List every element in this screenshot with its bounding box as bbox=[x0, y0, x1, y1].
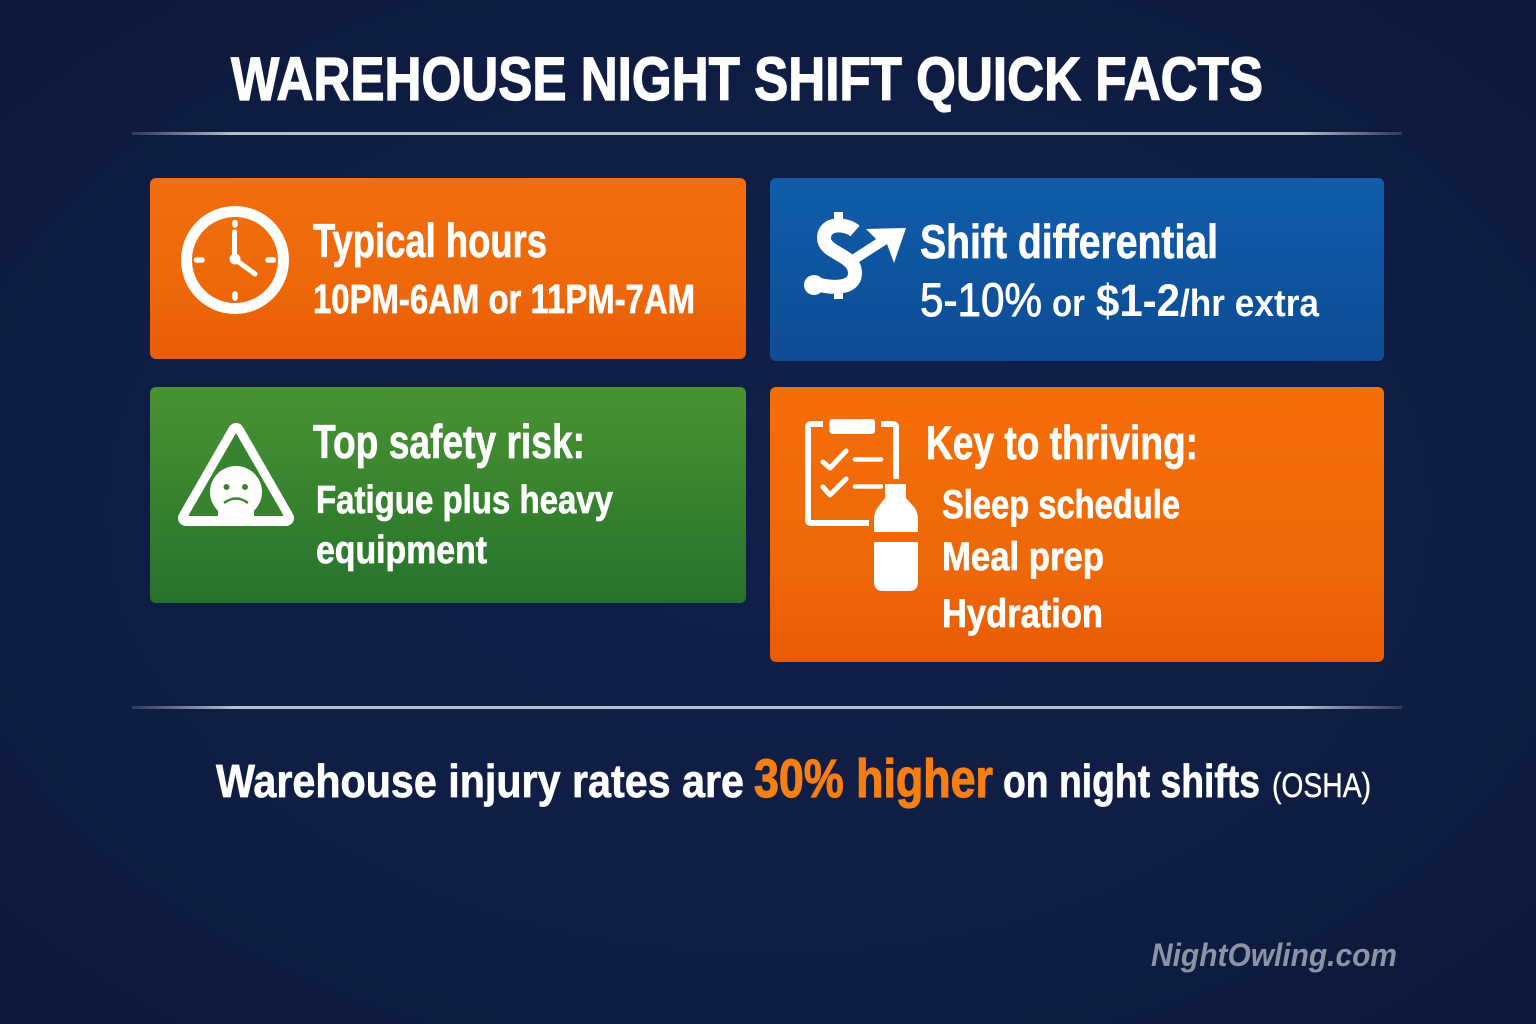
text: fatigue plus heavy equipment: Fatigue plus heavy bbox=[316, 479, 613, 522]
panel: shift differential bbox=[770, 178, 1384, 361]
callout: injury rate statistic: Warehouse injury rates are bbox=[216, 755, 744, 807]
callout: injury rate statistic: (OSHA) bbox=[1272, 767, 1371, 805]
text: hours values: 10PM-6AM or 11PM-7AM bbox=[313, 276, 695, 322]
watermark: NightOwling.com: NightOwling.com bbox=[1151, 937, 1397, 973]
icon: clock bbox=[186, 212, 284, 308]
panel: typical hours bbox=[150, 178, 746, 359]
text: meal prep: Meal prep bbox=[942, 535, 1104, 579]
callout: injury rate statistic bbox=[216, 749, 1371, 809]
callout: injury rate statistic: 30% higher bbox=[754, 749, 993, 809]
text: differential values bbox=[920, 273, 1320, 326]
title: WAREHOUSE NIGHT SHIFT QUICK FACTS bbox=[231, 45, 1263, 113]
text: differential values: $1-2 bbox=[1096, 275, 1180, 326]
text: fatigue plus heavy equipment: equipment bbox=[316, 529, 487, 572]
icon: clipboard and bottle bbox=[808, 419, 918, 591]
text: differential values: /hr extra bbox=[1180, 283, 1320, 325]
panel: key to thriving bbox=[770, 387, 1384, 662]
heading: key to thriving: Key to thriving: bbox=[926, 416, 1198, 469]
icon: dollar sign with arrow bbox=[804, 212, 906, 299]
text: differential values: 5-10% bbox=[920, 273, 1042, 326]
text: hydration: Hydration bbox=[942, 592, 1103, 636]
heading: shift differential: Shift differential bbox=[920, 215, 1218, 268]
text: sleep schedule: Sleep schedule bbox=[942, 483, 1180, 527]
icon: warning triangle with sad face bbox=[186, 431, 286, 520]
callout: injury rate statistic: on night shifts bbox=[1003, 755, 1260, 807]
heading: top safety risk: Top safety risk: bbox=[313, 415, 585, 468]
panel: top safety risk bbox=[150, 387, 746, 603]
heading: typical hours: Typical hours bbox=[313, 214, 547, 267]
text: fatigue plus heavy equipment bbox=[316, 479, 613, 572]
text: differential values: or bbox=[1052, 283, 1085, 325]
